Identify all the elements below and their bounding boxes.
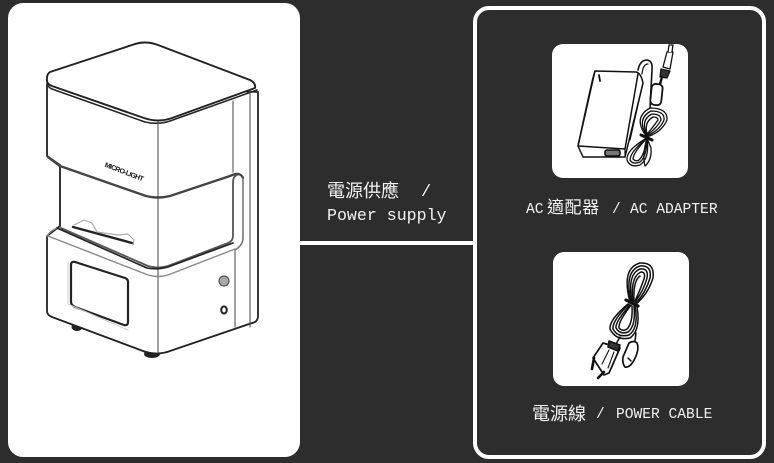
device lid	[47, 42, 255, 120]
card: power cable	[553, 252, 689, 386]
mains plug	[593, 343, 620, 375]
adapter brick	[578, 71, 643, 157]
logo: MICRO-LIGHT: MICRO-LIGHT	[103, 162, 144, 183]
label: power cable: POWER CABLE	[616, 407, 712, 423]
label: AC adapter: 適配器	[547, 200, 600, 219]
resin window	[61, 175, 237, 268]
power socket	[221, 306, 227, 314]
cable coil upper	[640, 108, 667, 137]
label: AC adapter: /	[612, 202, 621, 218]
label: AC adapter: AC ADAPTER	[630, 202, 718, 218]
text: power supply heading: /	[421, 183, 431, 202]
button	[219, 276, 229, 286]
cable tie	[641, 135, 652, 140]
cable tie	[626, 300, 638, 306]
cable loop behind brick	[638, 60, 652, 108]
handle	[73, 227, 132, 243]
device feet	[72, 323, 160, 358]
heading Chinese: 電源供應	[327, 183, 399, 203]
label: power cable: /	[596, 407, 605, 423]
lid lip	[47, 82, 257, 123]
device body fill and outline	[47, 84, 258, 354]
base top edge	[47, 228, 235, 276]
label: AC adapter: AC	[526, 202, 544, 218]
panel: power supply contents	[473, 6, 766, 459]
connector line	[300, 241, 474, 245]
label: AC adapter	[526, 198, 718, 219]
panel: device illustration	[8, 3, 300, 457]
card: AC adapter	[552, 44, 688, 178]
adapter socket	[605, 150, 620, 156]
label: power cable	[532, 404, 712, 426]
heading Chinese	[327, 181, 431, 203]
cable coil lower	[627, 138, 651, 166]
text: power supply heading	[327, 181, 446, 225]
cable coil lower	[610, 304, 638, 339]
vertical edges	[157, 122, 159, 352]
heading English: Power supply	[327, 206, 446, 225]
label: power cable: 電源線	[532, 406, 586, 426]
appliance connector	[623, 342, 638, 367]
DC plug	[663, 52, 673, 69]
upper housing lower edge	[48, 157, 243, 198]
touch screen	[71, 262, 128, 325]
cable coil upper	[627, 263, 653, 304]
ferrite bead	[650, 84, 663, 106]
